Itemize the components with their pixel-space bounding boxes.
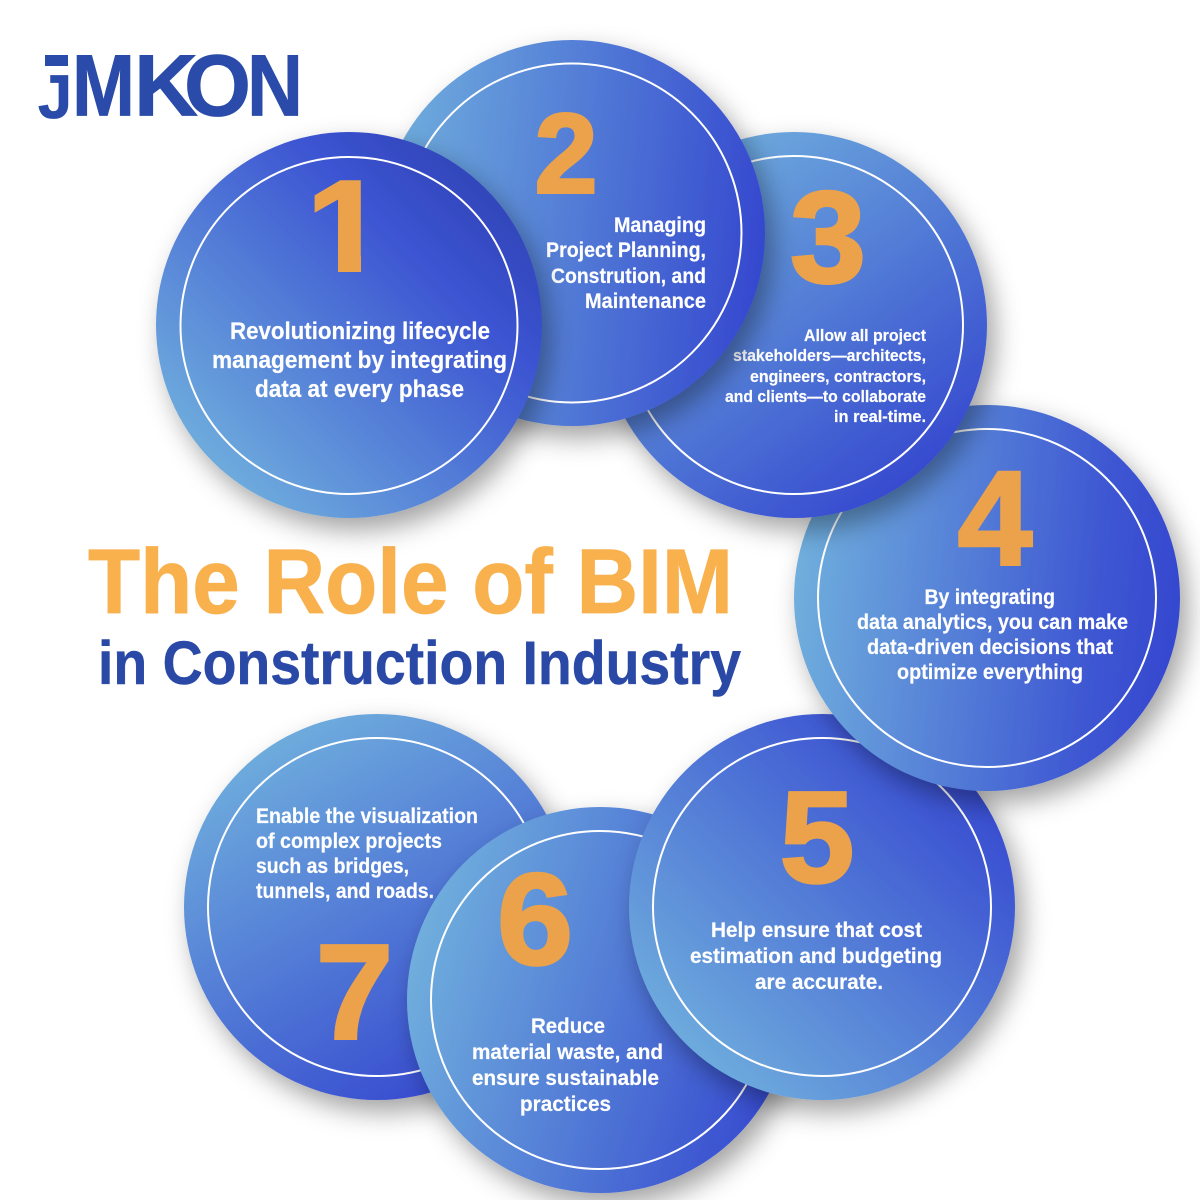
panel: step 7: such as bridges,: [256, 854, 409, 878]
panel: step 4: optimize everything: [897, 661, 1083, 684]
panel: step 7: of complex projects: [256, 829, 442, 853]
panel: step 3: in real-time.: [834, 407, 926, 426]
panel: step 2: Project Planning,: [546, 239, 706, 262]
panel: step 4: data-driven decisions that: [867, 636, 1113, 659]
panel: step 7: [184, 714, 570, 1100]
panel: step 1: management by integrating: [212, 347, 507, 374]
panel: step 3: Allow all project: [804, 326, 926, 345]
logo: JMKON: O: [184, 38, 251, 134]
panel: step 7: tunnels, and roads.: [256, 879, 434, 903]
panel: step 3: engineers, contractors,: [750, 367, 926, 386]
logo: JMKON: N: [247, 38, 303, 134]
panel: step 3: 3: [790, 165, 866, 310]
title: in Construction Industry: [98, 629, 741, 697]
panel: step 2: Maintenance: [585, 290, 706, 313]
logo: JMKON: K: [134, 38, 198, 134]
panel: step 6: ensure sustainable: [472, 1066, 659, 1090]
panel: step 7: Enable the visualization: [256, 804, 478, 828]
panel: step 7: 7: [316, 917, 393, 1068]
panel: step 6: Reduce: [531, 1014, 605, 1038]
panel: step 1: data at every phase: [255, 376, 464, 403]
number 1: 1: [307, 153, 385, 298]
panel: step 5: estimation and budgeting: [690, 944, 942, 968]
panel: step 1: [156, 132, 542, 518]
panel: step 6: 6: [497, 847, 573, 992]
logo: JMKON: [38, 38, 303, 134]
panel: step 5: [629, 714, 1015, 1100]
panel: step 4: 4: [958, 444, 1032, 594]
panel: step 3: [601, 132, 987, 518]
panel: step 4: By integrating: [924, 586, 1055, 609]
panel: step 3: and clients—to collaborate: [725, 387, 926, 406]
panel: step 2: [379, 40, 765, 426]
panel: step 6: material waste, and: [472, 1040, 663, 1064]
panel: step 2: 2: [535, 90, 597, 216]
panel: step 6: [407, 807, 793, 1193]
panel: step 3: stakeholders—architects,: [733, 346, 926, 365]
panel: step 2: Constrution, and: [551, 265, 706, 288]
panel: step 5: 5: [780, 765, 854, 910]
panel: step 1: Revolutionizing lifecycle: [230, 318, 490, 345]
panel: step 5: are accurate.: [755, 970, 883, 994]
panel: step 5: Help ensure that cost: [711, 918, 922, 942]
logo: JMKON: M: [72, 38, 135, 134]
panel: step 4: data analytics, you can make: [857, 611, 1128, 634]
panel: step 4: [794, 405, 1180, 791]
panel: step 2: Managing: [614, 214, 706, 237]
logo: JMKON: J: [38, 63, 72, 131]
title: The Role of BIM: [88, 531, 733, 633]
title: [88, 531, 741, 697]
panel: step 6: practices: [520, 1092, 611, 1116]
